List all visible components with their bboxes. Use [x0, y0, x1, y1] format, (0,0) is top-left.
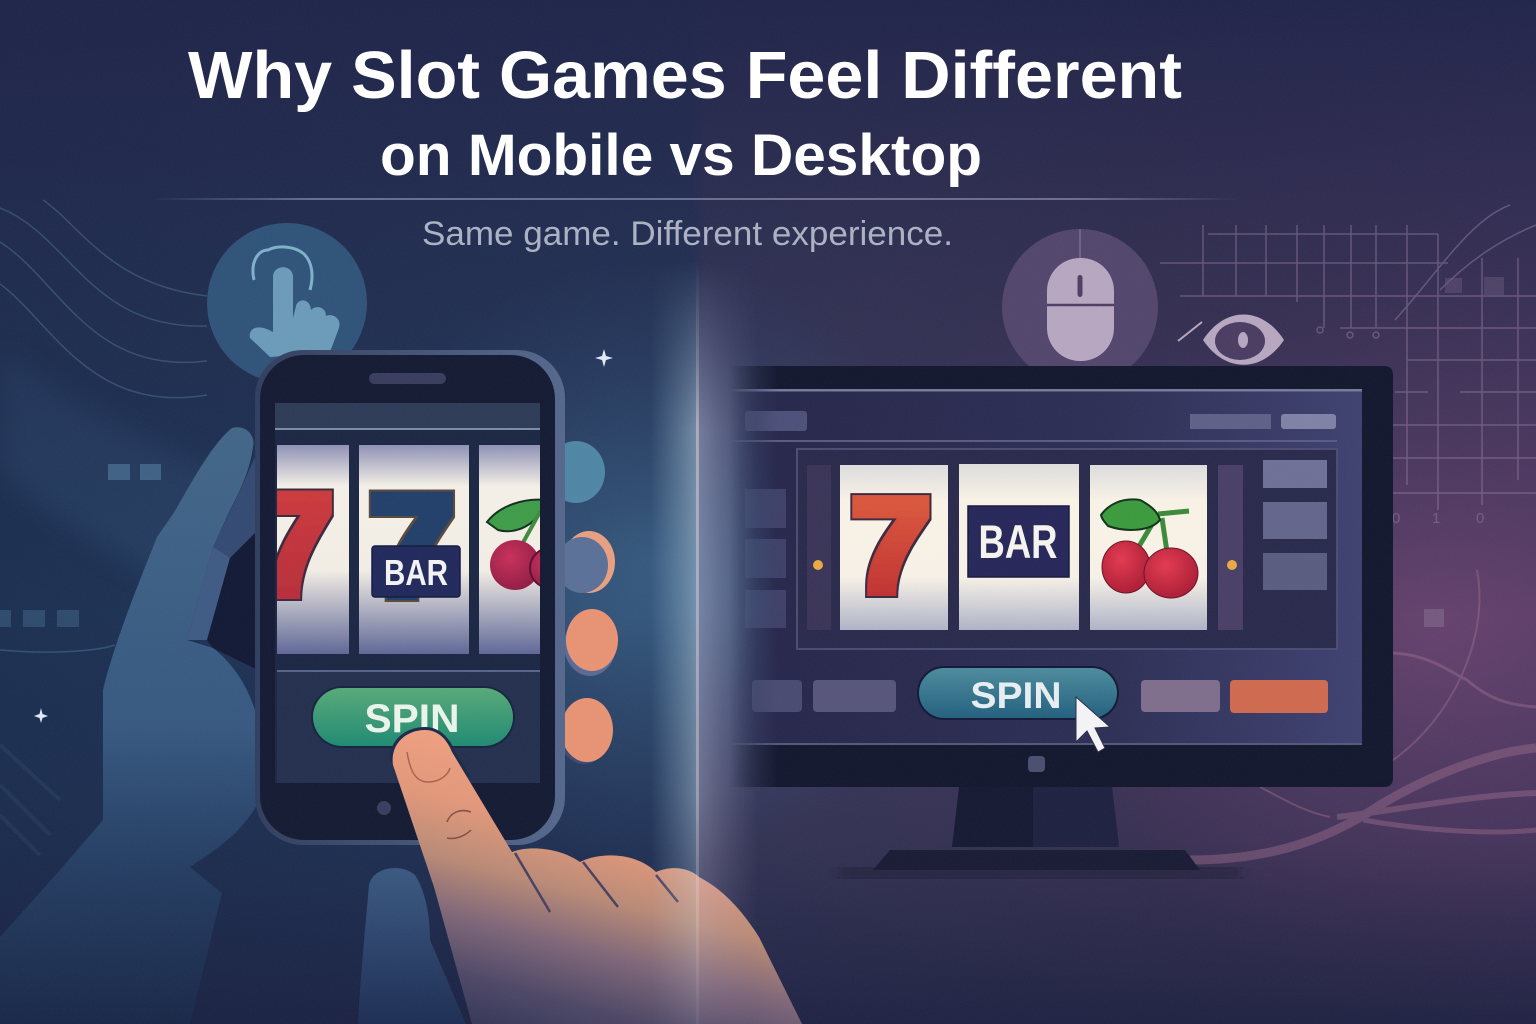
monitor reels: [840, 464, 1207, 630]
subtitle: Same game. Different experience.: [422, 215, 953, 253]
phone bar symbol: [372, 546, 460, 597]
phone red seven: 7: [256, 463, 334, 626]
icon: mouse: [1002, 229, 1158, 385]
phone side fingers: [547, 441, 618, 764]
right grid chart: 1: [1432, 510, 1440, 527]
phone bar symbol: BAR: [384, 552, 448, 593]
left data chips: [0, 464, 161, 627]
phone home button: [377, 801, 391, 815]
phone cherry: [486, 498, 540, 590]
phone spin button: SPIN: [364, 697, 460, 741]
left hand holding phone: [0, 427, 466, 1024]
phone speaker: [369, 373, 446, 384]
monitor side panels: [745, 460, 1327, 630]
pointing hand: [390, 727, 802, 1024]
monitor power button: [1028, 756, 1045, 772]
phone screen: [275, 403, 540, 783]
monitor bar symbol: [968, 506, 1069, 577]
monitor cherry: [1101, 499, 1198, 598]
title rule: [148, 198, 1240, 200]
monitor header chips: [745, 411, 1336, 431]
monitor stand: [840, 787, 1240, 878]
center divider: [656, 272, 748, 1024]
right grid chart: [1160, 205, 1536, 527]
monitor spin button: [917, 666, 1119, 720]
title: on Mobile vs Desktop: [380, 123, 982, 188]
left wave lines: [0, 200, 207, 855]
right wave lines: [1190, 570, 1536, 860]
monitor bar symbol: BAR: [978, 515, 1058, 568]
monitor: [720, 366, 1393, 878]
sparkles: [34, 349, 613, 723]
cursor arrow: [1076, 697, 1110, 752]
monitor body: [720, 366, 1393, 787]
title: [188, 38, 1182, 188]
phone spin button: [311, 686, 515, 748]
monitor seven: 7: [850, 470, 932, 621]
icon: touch gesture: [207, 223, 367, 383]
phone reels: [277, 445, 540, 654]
right grid chart: 0: [1392, 510, 1400, 527]
icon: eye: [1178, 314, 1284, 365]
phone blue seven: 7: [368, 464, 456, 627]
phone: [255, 350, 570, 845]
title: Why Slot Games Feel Different: [188, 38, 1182, 113]
monitor spin button: SPIN: [970, 675, 1062, 716]
monitor button row: [752, 680, 1328, 713]
right grid chart: 0: [1476, 510, 1484, 527]
monitor screen: [720, 389, 1362, 745]
